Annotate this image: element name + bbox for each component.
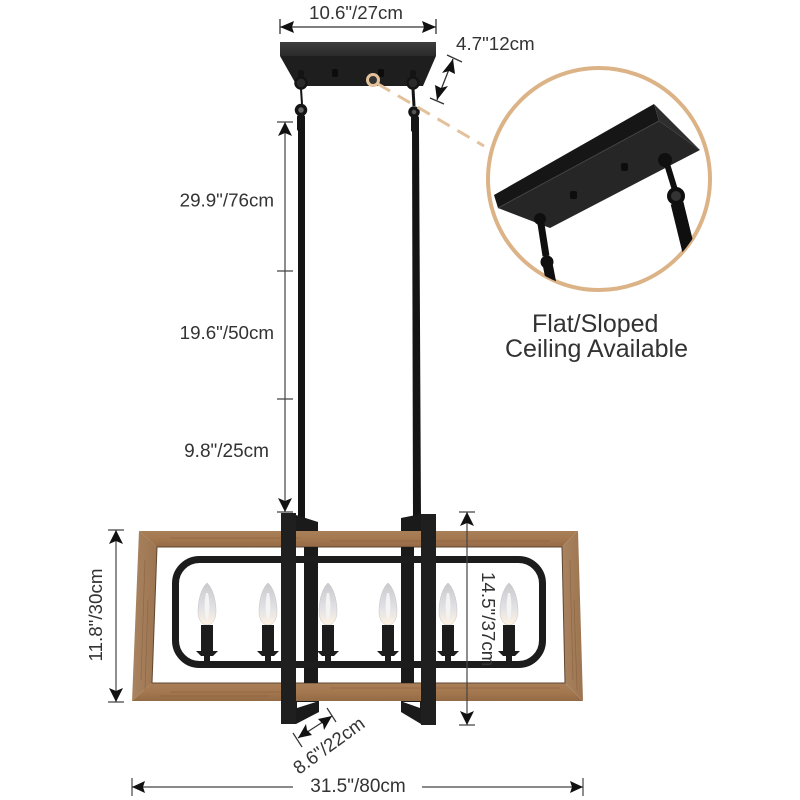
dimension: overall height: 14.5"/37cm bbox=[478, 572, 499, 666]
inset circle: sloped ceiling detail bbox=[488, 68, 710, 292]
tan marker ring and dashed leader bbox=[368, 74, 484, 146]
dimension: overall width: 31.5"/80cm bbox=[310, 776, 406, 797]
front left bar bbox=[281, 513, 296, 724]
dimension: rod lengths bbox=[180, 122, 293, 512]
right hanging rod bbox=[408, 70, 421, 520]
rear right bar bbox=[401, 514, 421, 724]
dimension: canopy width bbox=[280, 2, 436, 34]
dimension: rod lengths: 9.8"/25cm bbox=[184, 441, 269, 462]
canopy screw studs bbox=[332, 69, 384, 77]
inset plate bbox=[494, 104, 659, 208]
ceiling canopy plate bbox=[280, 42, 436, 86]
caption: flat or sloped ceiling bbox=[505, 310, 688, 363]
wood frame bbox=[132, 531, 583, 701]
dimension: overall width bbox=[132, 776, 583, 797]
dimension: overall height bbox=[459, 512, 499, 725]
dimension: rod lengths: 29.9"/76cm bbox=[180, 190, 274, 210]
dimension: rod lengths: 19.6"/50cm bbox=[180, 322, 274, 343]
dimension: frame height: 11.8"/30cm bbox=[85, 569, 106, 661]
candle lights bbox=[196, 583, 520, 663]
caption: flat or sloped ceiling: Flat/Sloped bbox=[532, 310, 658, 338]
caption: flat or sloped ceiling: Ceiling Available bbox=[505, 335, 688, 363]
infographic: chandelier dimension diagram bbox=[88, 6, 712, 796]
inset chains and rods bbox=[534, 153, 690, 292]
black rounded inner frame bbox=[176, 560, 542, 664]
rear left bar bbox=[296, 515, 319, 724]
left hanging rod bbox=[296, 70, 306, 520]
dimension: canopy depth: 4.7"12cm bbox=[456, 33, 535, 54]
dimension: fixture depth: 8.6"/22cm bbox=[289, 712, 369, 778]
dimension: canopy width: 10.6"/27cm bbox=[309, 2, 403, 23]
front right bar bbox=[421, 514, 436, 725]
dimension: frame height bbox=[85, 530, 124, 702]
dimension: canopy depth bbox=[430, 33, 535, 104]
